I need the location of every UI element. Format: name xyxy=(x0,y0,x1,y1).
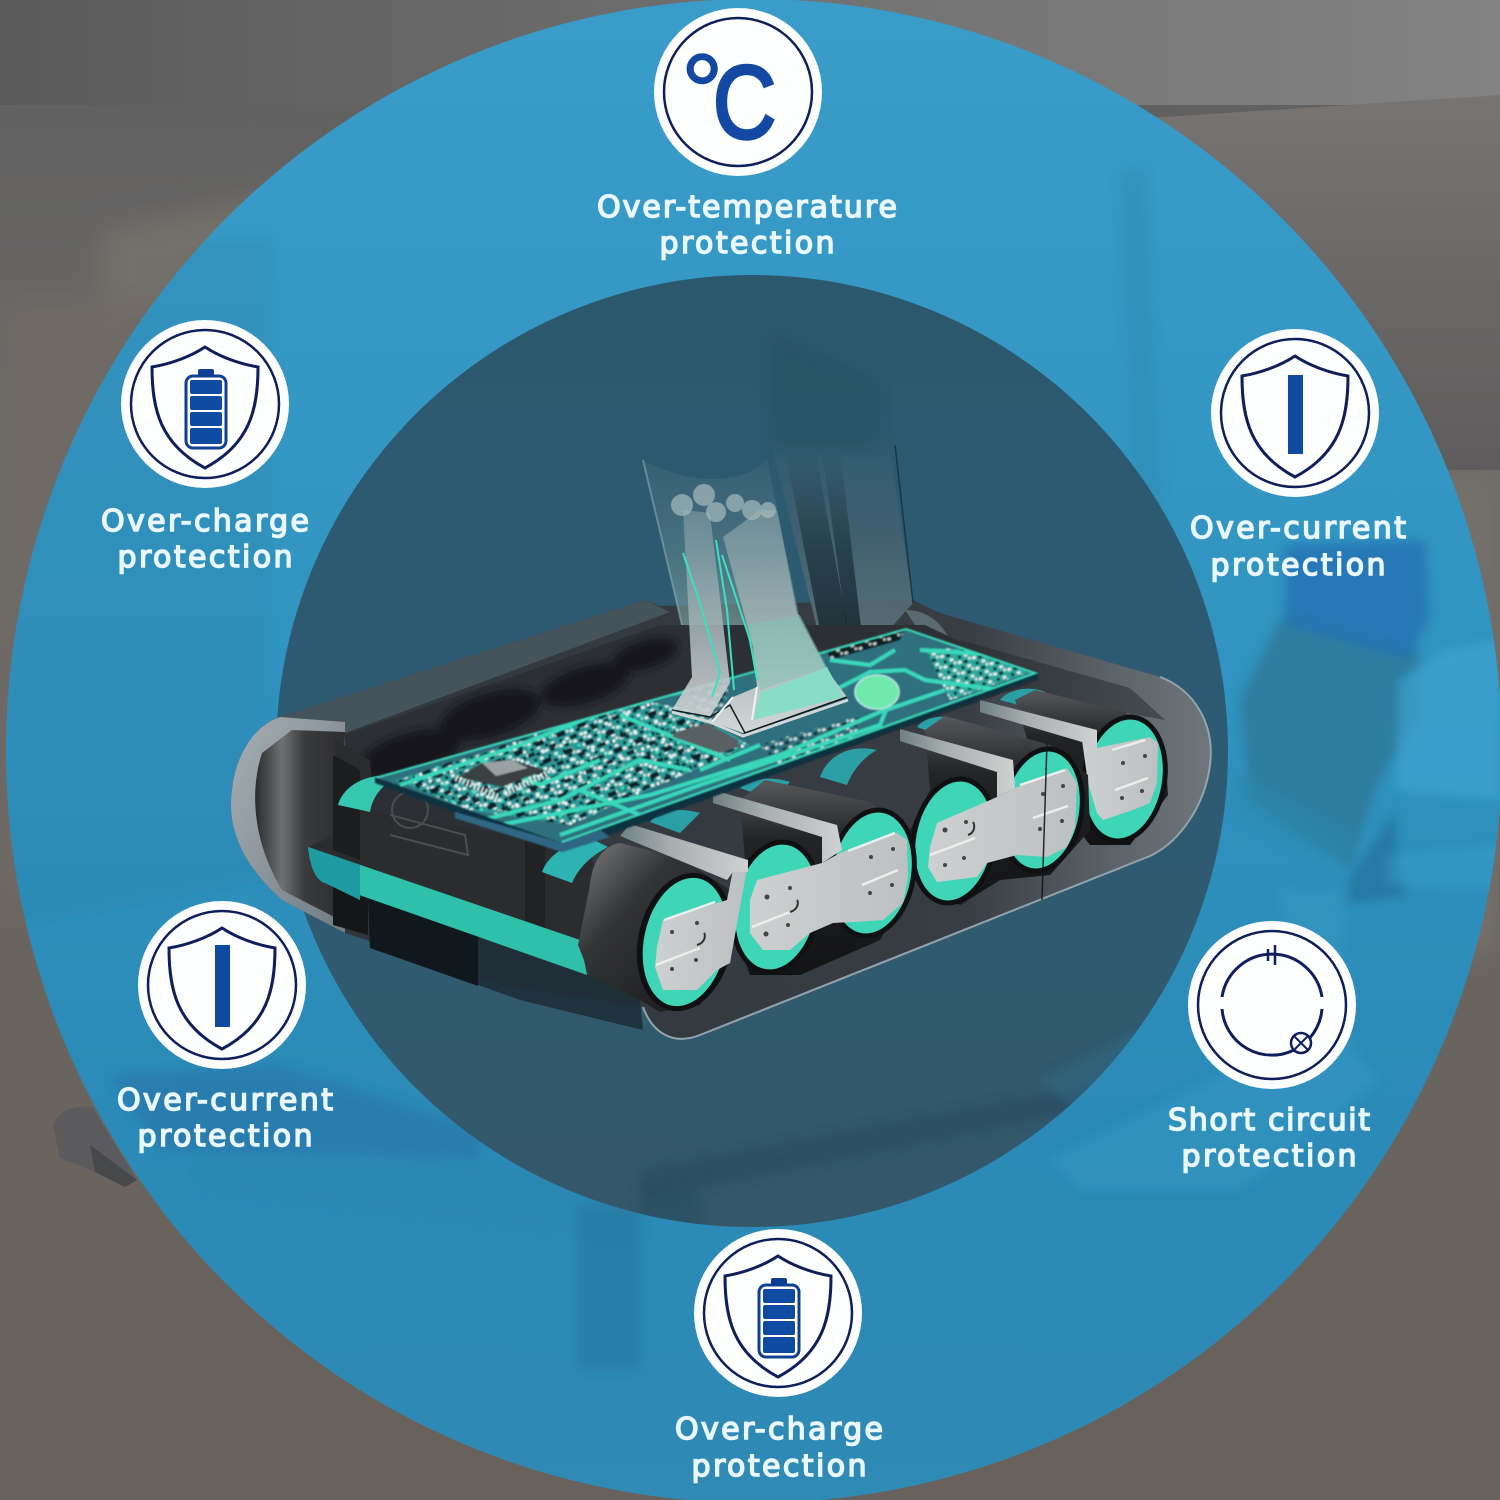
badge: over-charge protection (bottom) xyxy=(675,1229,883,1484)
label: Over-current xyxy=(117,1083,333,1118)
microchip large xyxy=(456,760,548,797)
cell 6 xyxy=(980,690,1178,850)
badge: over-temperature protection xyxy=(597,8,897,261)
battery cells front row xyxy=(578,690,1178,1020)
icon: shield with bar xyxy=(138,901,306,1069)
icon: circuit loop xyxy=(1188,921,1356,1089)
label: Over-charge xyxy=(675,1412,883,1447)
green capacitor xyxy=(855,675,899,709)
badge: over-charge protection (left) xyxy=(101,320,309,575)
circuit board xyxy=(375,627,1038,852)
dark inner circle xyxy=(276,275,1230,1240)
cells 4 and 5 xyxy=(900,716,1094,912)
translucent handle xyxy=(643,430,950,670)
microchip small xyxy=(673,723,738,753)
teal wrap band xyxy=(308,847,587,975)
icon: celsius: ° xyxy=(681,33,723,151)
label: protection xyxy=(692,1449,866,1484)
connector contacts xyxy=(671,484,848,736)
cells 2 and 3 xyxy=(713,780,927,982)
label: protection xyxy=(1210,548,1386,583)
icon: celsius xyxy=(654,8,822,176)
label: Over-charge xyxy=(101,504,309,539)
cell 1 xyxy=(578,824,748,1020)
label: protection xyxy=(138,1119,312,1154)
rear cell bodies behind board xyxy=(345,625,1040,850)
battery outer shell xyxy=(231,600,1211,1039)
icon: shield with battery xyxy=(694,1229,862,1397)
icon: celsius: C xyxy=(713,45,776,161)
label: Over-temperature xyxy=(597,190,897,225)
label: protection xyxy=(118,540,292,575)
icon: shield with bar xyxy=(1211,329,1379,497)
battery illustration xyxy=(231,430,1211,1039)
label: Over-current xyxy=(1190,511,1406,546)
main dark battery block xyxy=(308,740,605,945)
label: protection xyxy=(660,226,834,261)
label: protection xyxy=(1182,1139,1356,1174)
badge: over-current protection (right) xyxy=(1190,329,1406,583)
badge: over-current protection (left) xyxy=(117,901,333,1154)
left end cap xyxy=(231,717,345,933)
icon: shield with battery xyxy=(121,320,289,488)
badge: short circuit protection xyxy=(1168,921,1370,1174)
cell seam xyxy=(1042,742,1047,900)
dark lower block xyxy=(333,880,643,1030)
teal cell rear edges xyxy=(338,689,1045,883)
background: vacuum head on floor xyxy=(53,1107,137,1187)
label: Short circuit xyxy=(1168,1103,1370,1138)
